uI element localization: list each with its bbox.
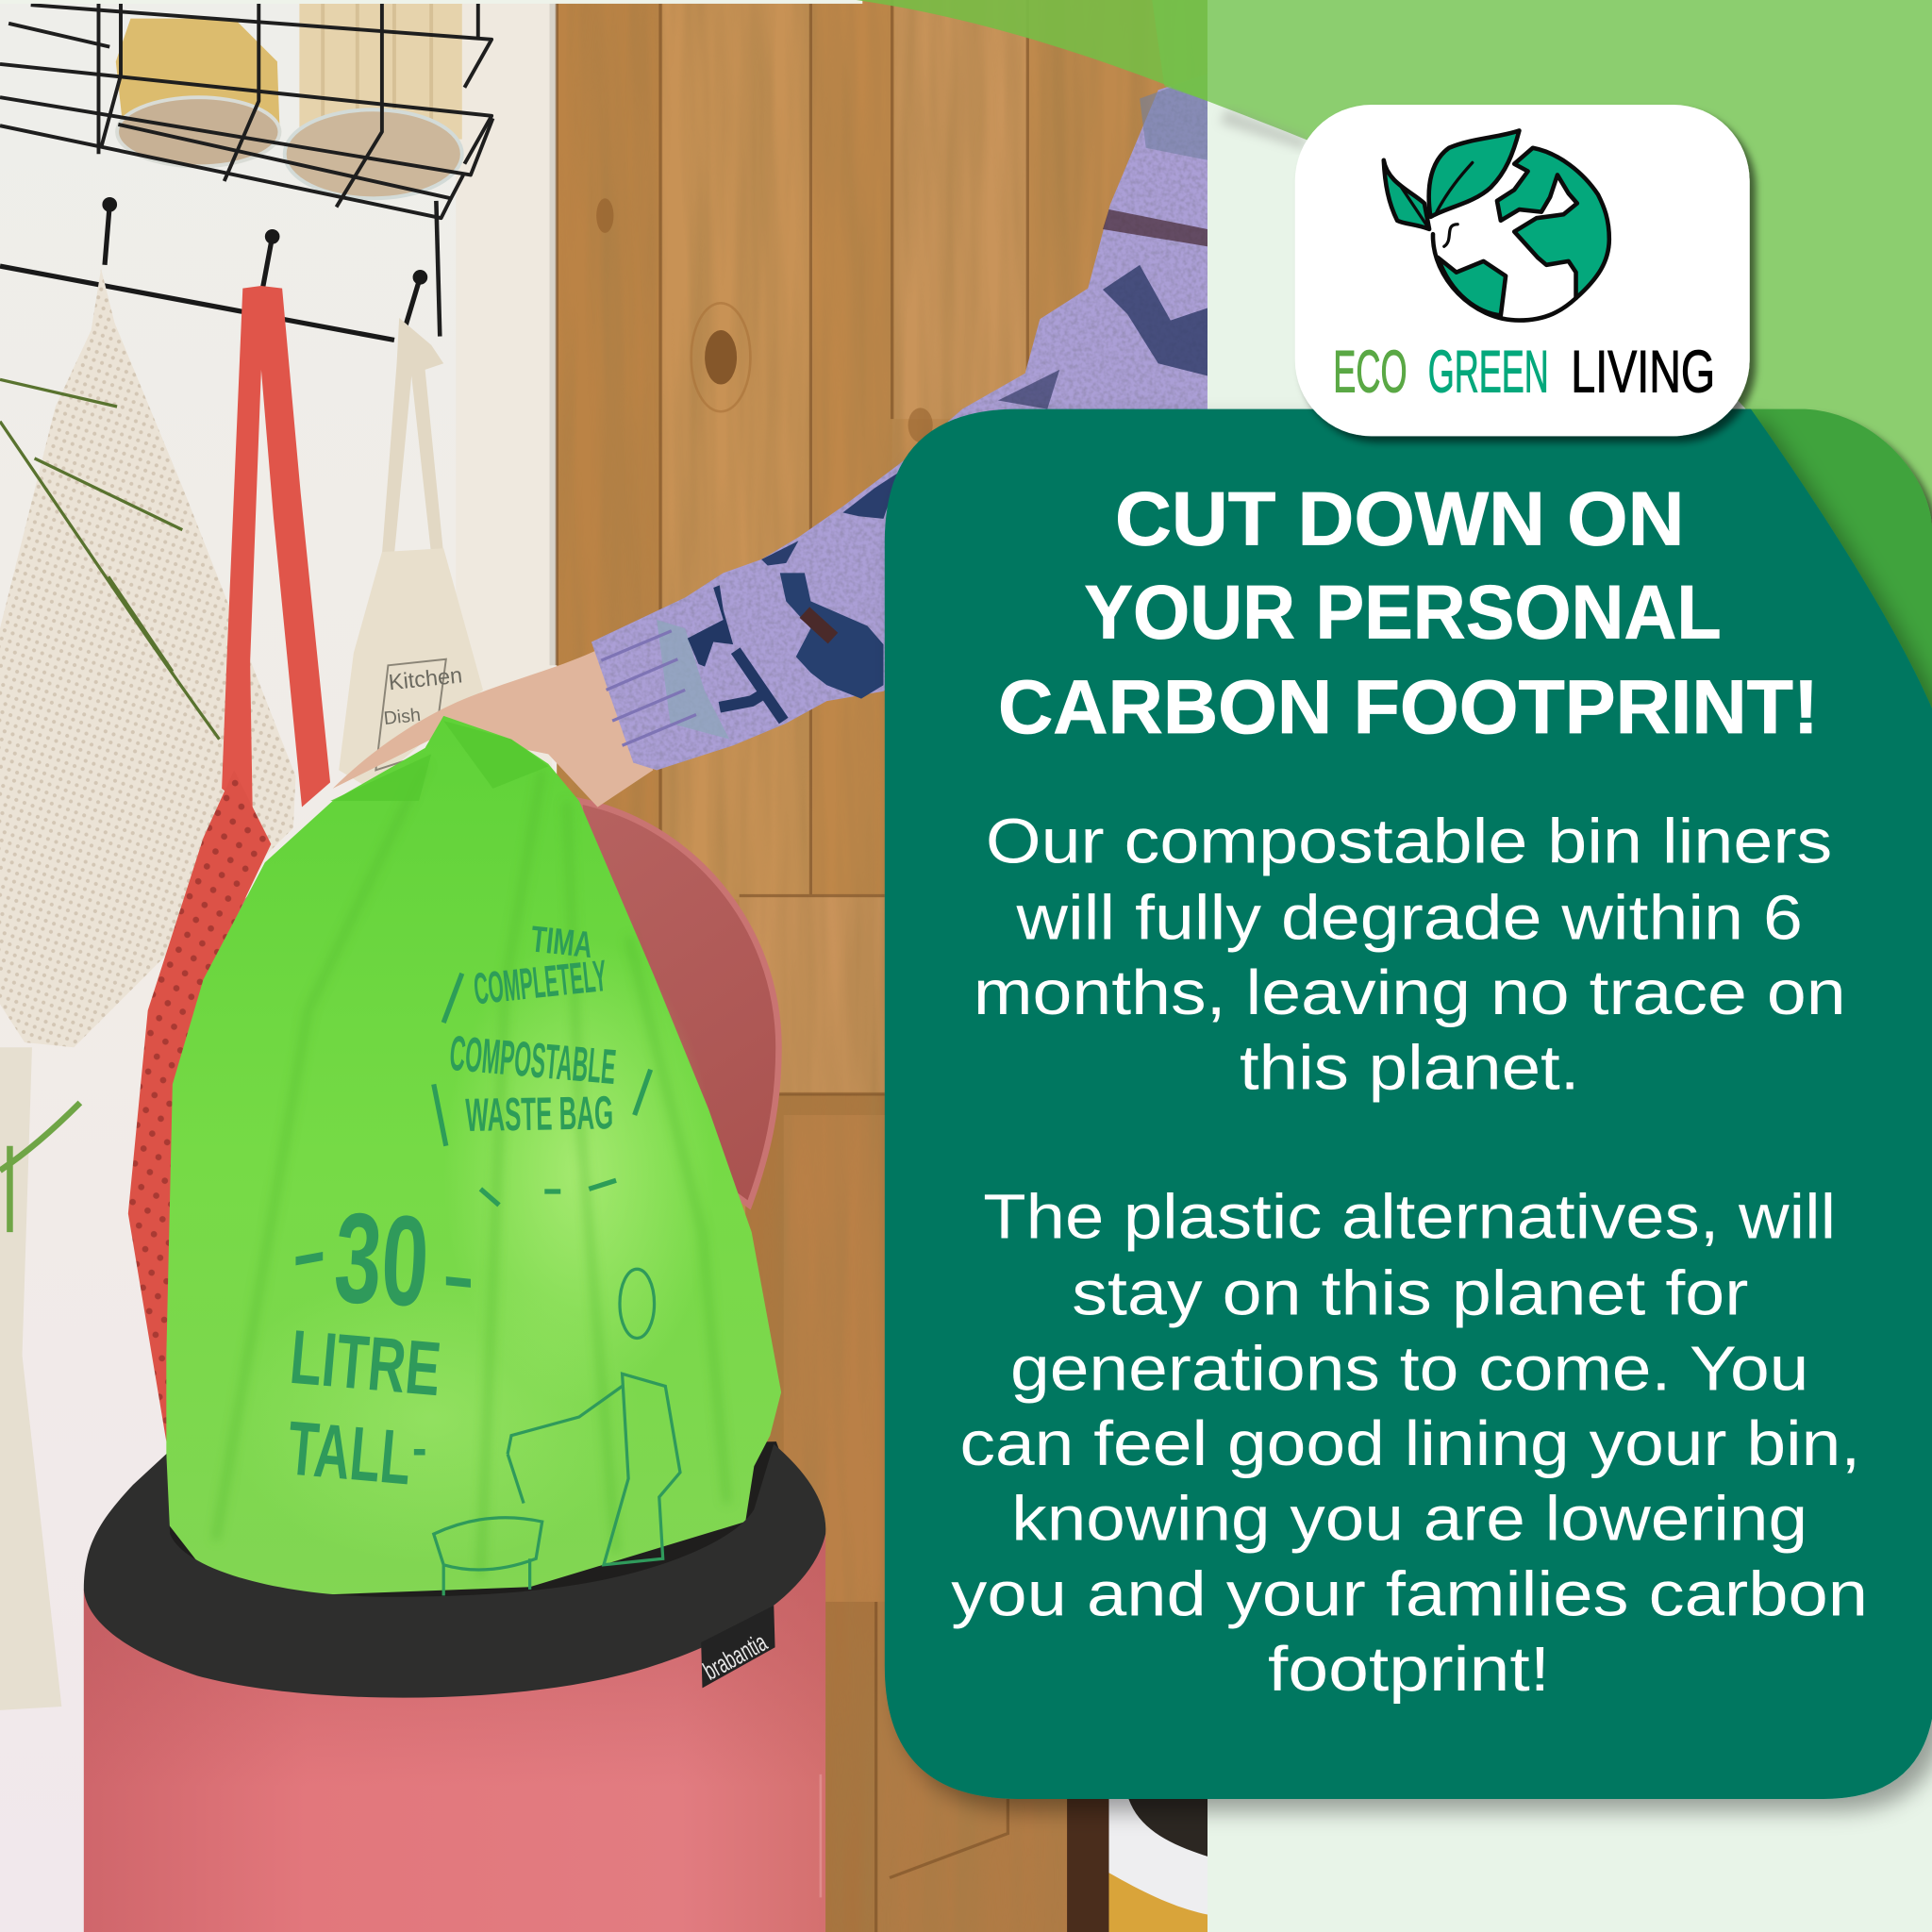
body text: second paragraph: knowing you are lowering	[1011, 1485, 1807, 1555]
body text: second paragraph	[951, 1183, 1868, 1705]
green compostable bag	[166, 716, 781, 1597]
bag print: 30 litre tall: LITRE	[287, 1315, 444, 1412]
top strip of light background	[0, 0, 862, 4]
green compostable bag: COMPLETELY	[472, 950, 608, 1013]
logo wordmark	[1333, 339, 1715, 405]
body text: first paragraph	[974, 807, 1846, 1104]
plant pot	[1109, 1799, 1208, 1932]
wall	[0, 0, 557, 1932]
body text: first paragraph: this planet.	[1240, 1034, 1579, 1104]
cotton drawstring pouch: Kitchen	[388, 662, 463, 694]
bag print: compostable badge wording: WASTE BAG	[465, 1086, 614, 1141]
bag print: 30 litre tall: 30	[331, 1185, 432, 1333]
body text: second paragraph: can feel good lining your bin,	[959, 1409, 1860, 1479]
mid-green shape behind the panel	[1725, 409, 1932, 789]
logo card	[1295, 105, 1750, 436]
bag print: person illustration	[434, 1269, 680, 1595]
sweater sleeve	[591, 74, 1208, 770]
body text: second paragraph: generations to come. You	[1010, 1334, 1808, 1404]
knit pattern: navy motif	[780, 573, 883, 699]
back of bin rim	[166, 1441, 779, 1597]
body text: second paragraph: footprint!	[1268, 1635, 1550, 1705]
jars of pasta and spaghetti	[116, 4, 462, 198]
pink bin lid	[182, 801, 778, 1205]
bag print: 30 litre tall: TALL	[284, 1406, 414, 1501]
body text: second paragraph: stay on this planet for	[1072, 1259, 1748, 1329]
front black rim	[84, 1444, 825, 1698]
brabantia label: brabantia	[698, 1627, 772, 1686]
mesh cotton bag	[0, 269, 295, 1047]
cuff ribbing	[601, 631, 696, 745]
panel: main teal message panel	[885, 409, 1932, 1799]
bin body	[84, 1534, 825, 1932]
heading	[998, 476, 1819, 750]
body text: second paragraph: The plastic alternatives, will	[983, 1183, 1836, 1253]
background: pale green right column	[1208, 0, 1932, 1932]
brabantia label	[698, 1606, 775, 1688]
logo wordmark: LIVING	[1571, 339, 1715, 405]
bag print: compostable badge wording: TIMA	[529, 920, 594, 966]
body text: first paragraph: months, leaving no trace on	[974, 958, 1846, 1028]
cotton drawstring pouch: Dish	[383, 705, 422, 729]
top-right light green swoosh	[857, 0, 1932, 740]
green compostable bag: COMPOSTABLE	[447, 1026, 618, 1095]
hook rail and hooks	[0, 198, 427, 340]
heading: CUT DOWN ON	[1115, 476, 1684, 561]
logo wordmark: GREEN	[1428, 339, 1549, 405]
heading: CARBON FOOTPRINT!	[998, 665, 1819, 750]
body text: first paragraph: will fully degrade within 6	[1015, 883, 1803, 953]
wooden door	[557, 0, 1208, 1932]
pale cloth hanging lower left	[0, 1047, 61, 1710]
cotton drawstring pouch	[339, 318, 483, 789]
bag print: 30 litre tall	[291, 1213, 471, 1485]
body text: second paragraph: you and your families carbon	[951, 1559, 1868, 1629]
icon: globe with leaves	[1384, 130, 1609, 321]
bag print: compostable badge wording	[451, 926, 616, 1131]
logo wordmark: ECO	[1333, 339, 1407, 405]
photo: woman lowering compostable bag into pink bin	[0, 0, 1208, 1932]
body text: first paragraph: Our compostable bin liners	[986, 807, 1832, 876]
heading: YOUR PERSONAL	[1084, 571, 1722, 656]
upper sleeve pattern	[1103, 209, 1208, 246]
wire rack	[0, 4, 492, 337]
bag print: badge dashes	[434, 974, 651, 1205]
plant stems	[0, 379, 219, 1232]
cuff grey-blue patch	[657, 620, 729, 740]
red crochet string bag	[128, 286, 330, 1441]
hand	[333, 647, 653, 808]
